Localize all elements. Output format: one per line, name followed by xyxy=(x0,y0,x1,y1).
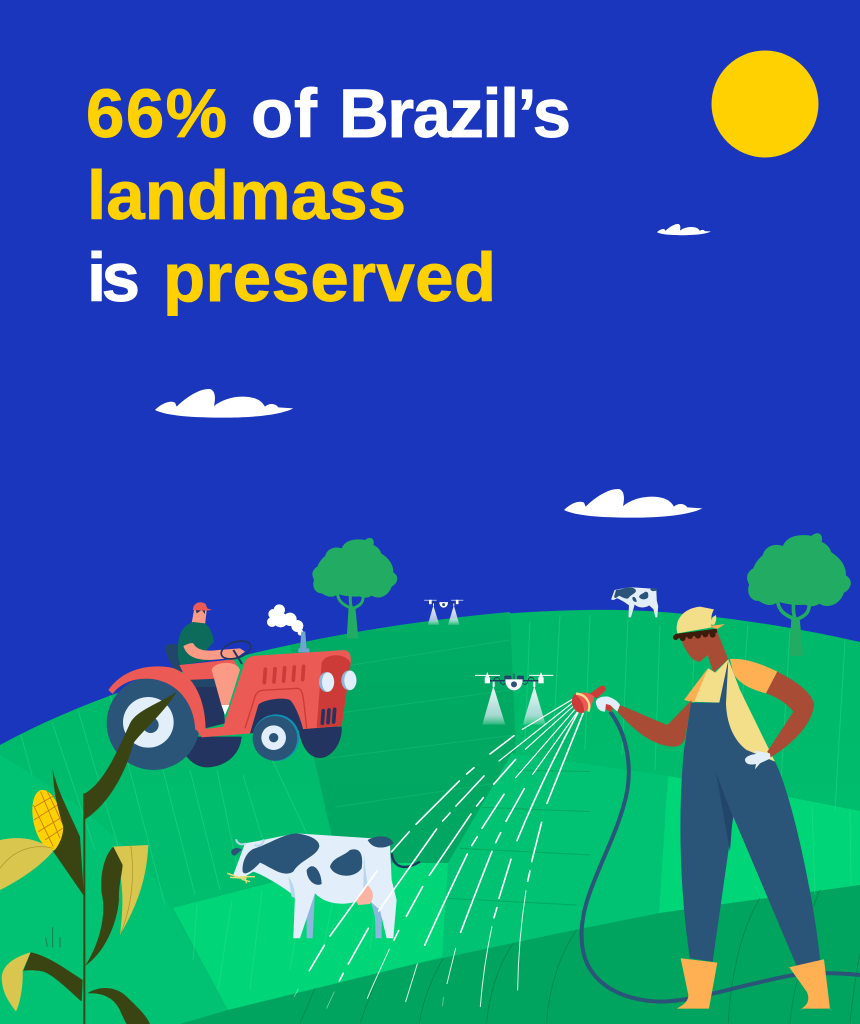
boots xyxy=(677,958,717,1009)
field furrow lines xyxy=(21,615,860,1023)
exhaust pipe xyxy=(298,632,309,652)
title: preserved xyxy=(163,239,496,316)
corn dark leaves xyxy=(84,692,177,819)
back legs xyxy=(307,893,382,938)
title xyxy=(86,75,571,316)
rear axle and front axle shadows xyxy=(177,727,342,767)
hair xyxy=(673,629,717,641)
title: 66% xyxy=(86,75,227,152)
corn stalk xyxy=(83,793,85,1024)
rear wheel xyxy=(107,677,200,770)
orange sleeve right xyxy=(730,659,777,693)
field: darker middle patch xyxy=(290,612,516,863)
smoke xyxy=(267,604,304,636)
distant cow xyxy=(611,587,658,617)
tractor body xyxy=(197,650,351,737)
hand glove on nozzle xyxy=(596,697,620,712)
title: Brazil’s xyxy=(339,75,571,152)
corn husk leaves xyxy=(0,838,53,890)
cow udder xyxy=(355,884,373,905)
small distant drone xyxy=(424,600,463,625)
title: of xyxy=(251,75,318,152)
driver xyxy=(192,610,207,625)
hose nozzle xyxy=(589,686,606,698)
sun xyxy=(712,50,818,158)
field: lower right patch xyxy=(442,753,668,957)
rolling green hill xyxy=(0,610,860,1024)
farmer with hose xyxy=(572,607,830,1009)
title: is xyxy=(87,239,140,316)
cow spots xyxy=(243,833,393,885)
title: landmass xyxy=(87,157,406,234)
field: bright patch beside cow xyxy=(173,863,448,1010)
radiator vents xyxy=(264,666,304,683)
seat xyxy=(165,644,218,687)
cow tail xyxy=(392,853,420,867)
corn grass tuft xyxy=(45,927,60,947)
overalls xyxy=(680,660,821,966)
cloud: left xyxy=(155,389,293,418)
cow grazing xyxy=(227,833,420,938)
head and neck xyxy=(681,630,728,673)
steering wheel xyxy=(219,638,253,662)
foreground dark field xyxy=(180,885,860,1024)
tree: right xyxy=(747,533,851,656)
hand glove on hip xyxy=(745,751,771,769)
water spray xyxy=(294,699,583,1008)
corn cob xyxy=(27,787,68,853)
garden hose xyxy=(582,712,860,1002)
hay xyxy=(227,873,255,883)
cow body xyxy=(233,833,397,938)
corn plant xyxy=(0,692,177,1024)
field: bright patch right xyxy=(659,776,860,913)
hat xyxy=(677,607,714,633)
cloud: top right xyxy=(657,224,711,235)
headlights xyxy=(319,672,334,692)
tractor with driver xyxy=(107,602,357,770)
left arm xyxy=(617,700,692,747)
drone spraying xyxy=(475,672,553,725)
cloud: right xyxy=(564,489,702,518)
shirt xyxy=(690,659,775,762)
field: left lower patch xyxy=(0,755,228,1024)
tree: middle xyxy=(312,538,397,638)
orange sleeve left xyxy=(684,668,708,702)
front wheel xyxy=(253,714,299,761)
right arm xyxy=(766,672,814,757)
